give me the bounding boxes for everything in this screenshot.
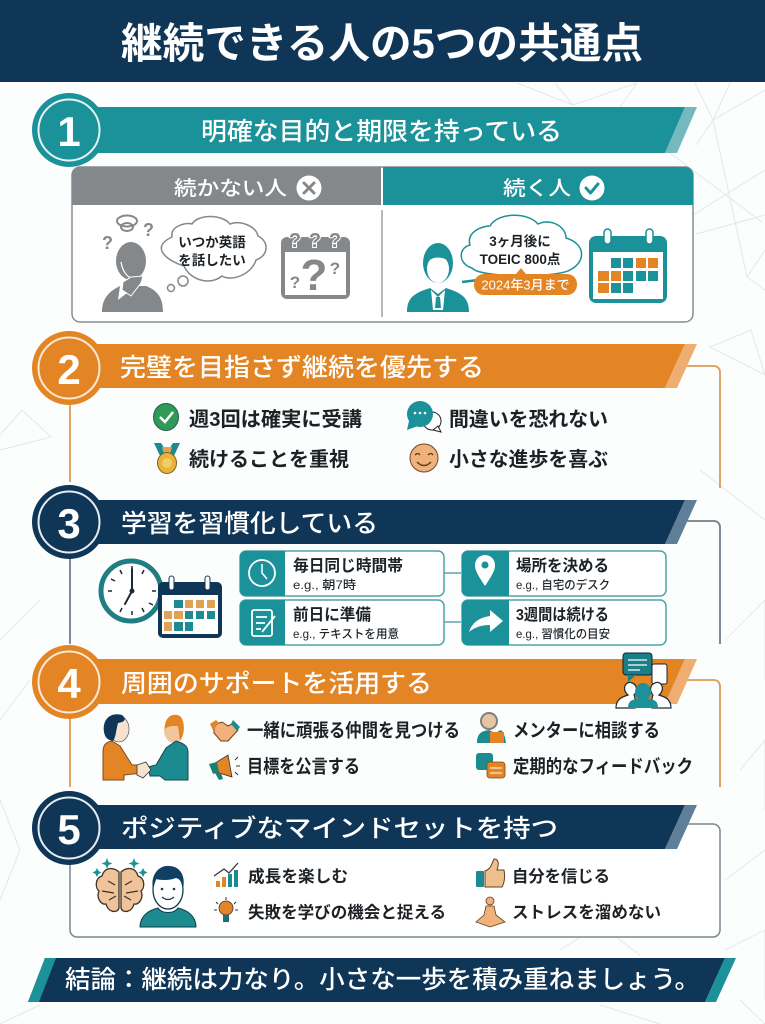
item: smile [410, 444, 608, 472]
item: feedback [476, 753, 693, 778]
section 1 header: 明確な目的と期限を持っている [201, 118, 562, 146]
card: decide place: e.g., 自宅のデスク [516, 577, 610, 592]
section 5 header [32, 791, 697, 865]
item: attend weekly [154, 404, 362, 431]
card: prepare: 前日に準備 [293, 605, 371, 624]
callout: vague wish [161, 216, 266, 292]
section 1 header [32, 93, 697, 167]
icon: businessperson [407, 243, 469, 312]
callout: vague wish: いつか英語 [178, 234, 246, 250]
conclusion banner [28, 958, 736, 1002]
item: speech bubbles: 間違いを恐れない [449, 408, 608, 431]
panel: comparison [72, 167, 693, 322]
title: 継続できる人の5つの共通点 [121, 20, 643, 67]
conclusion banner: 結論：継続は力なり。小さな一歩を積み重ねましょう。 [65, 966, 700, 994]
item: smile: 小さな進歩を喜ぶ [449, 448, 608, 471]
item: medal: 続けることを重視 [189, 448, 349, 471]
icon: calendar with question marks: ? [329, 230, 341, 252]
section 4 header: 周囲のサポートを活用する [121, 670, 432, 698]
icon: confused person [102, 216, 163, 312]
icon: confused person: ? [143, 220, 154, 240]
item: enjoy growth: 成長を楽しむ [248, 866, 348, 886]
icon: group discussion [616, 653, 671, 708]
icon: calendar with question marks: ? [290, 273, 300, 292]
card: three weeks: e.g., 習慣化の目安 [516, 626, 610, 641]
item: find companions: 一緒に頑張る仲間を見つける [247, 720, 460, 741]
card: prepare: e.g., テキストを用意 [293, 627, 399, 641]
heading: continuers [503, 176, 604, 200]
section 4 header: 4 [57, 660, 81, 707]
list: section 4 items [209, 713, 693, 780]
section 2 frame lines [70, 366, 720, 488]
item: learn from failure: 失敗を学びの機会と捉える [248, 902, 446, 922]
list: section 2 items [154, 401, 608, 474]
section 5 header: 5 [57, 806, 81, 853]
item: megaphone: 目標を公言する [247, 756, 360, 777]
heading: non-continuers [174, 176, 322, 200]
panel: section 5 box [70, 824, 720, 937]
card: same time: e.g., 朝7時 [293, 577, 356, 592]
card: same time [240, 551, 444, 596]
item: attend weekly: 週3回は確実に受講 [189, 408, 362, 431]
item: megaphone [209, 755, 360, 780]
card: decide place: 場所を決める [516, 557, 609, 575]
heading: non-continuers: 続かない人 [174, 177, 287, 200]
card: prepare [240, 600, 444, 645]
item: speech bubbles [407, 401, 608, 432]
item: manage stress [476, 897, 661, 927]
icon: calendar with question marks [281, 230, 350, 300]
item: learn from failure [214, 897, 446, 922]
section 2 header: 完璧を目指さず継続を優先する [120, 354, 484, 382]
section 1 header: 1 [57, 108, 81, 155]
icon: confused person: ? [102, 233, 113, 253]
list: section 5 items [214, 859, 661, 927]
item: believe in yourself [476, 859, 610, 887]
section 2 header [32, 331, 697, 405]
item: medal [154, 443, 349, 474]
card: same time: 毎日同じ時間帯 [293, 556, 403, 575]
section 3 frame lines [70, 521, 720, 644]
section 3 header: 3 [57, 500, 81, 547]
heading: continuers: 続く人 [503, 177, 571, 200]
icon: calendar with question marks: ? [330, 259, 340, 278]
section 5 header: ポジティブなマインドセットを持つ [121, 815, 558, 843]
item: feedback: 定期的なフィードバック [513, 756, 693, 777]
icon: clock and calendar [101, 561, 222, 638]
section 3 header [32, 485, 697, 559]
icon: calendar with schedule [589, 229, 667, 303]
icon: brain and person [92, 858, 196, 927]
card: three weeks [462, 600, 666, 645]
item: believe in yourself: 自分を信じる [512, 866, 610, 886]
icon: calendar with question marks: ? [301, 251, 327, 300]
header band [0, 0, 765, 82]
icon: calendar with question marks: ? [289, 230, 301, 252]
card: three weeks: 3週間は続ける [516, 606, 609, 624]
item: mentor: メンターに相談する [513, 720, 660, 741]
connectors: section 3 cards [443, 573, 461, 622]
callout: concrete goal: TOEIC 800点 [480, 252, 561, 267]
section 4 frame lines [70, 680, 720, 787]
item: enjoy growth [214, 863, 348, 887]
section 2 header: 2 [57, 346, 81, 393]
callout: concrete goal [461, 215, 582, 295]
section 4 header [32, 645, 697, 719]
item: mentor [477, 713, 660, 743]
card: decide place [462, 551, 666, 596]
callout: vague wish: を話したい [178, 253, 246, 268]
icon: calendar with question marks: ? [309, 230, 321, 252]
item: manage stress: ストレスを溜めない [512, 903, 661, 922]
section 3 header: 学習を習慣化している [121, 510, 378, 538]
icon: handshake figures [103, 714, 188, 780]
callout: concrete goal: 3ヶ月後に [489, 233, 551, 249]
callout: concrete goal: 2024年3月まで [481, 278, 570, 292]
